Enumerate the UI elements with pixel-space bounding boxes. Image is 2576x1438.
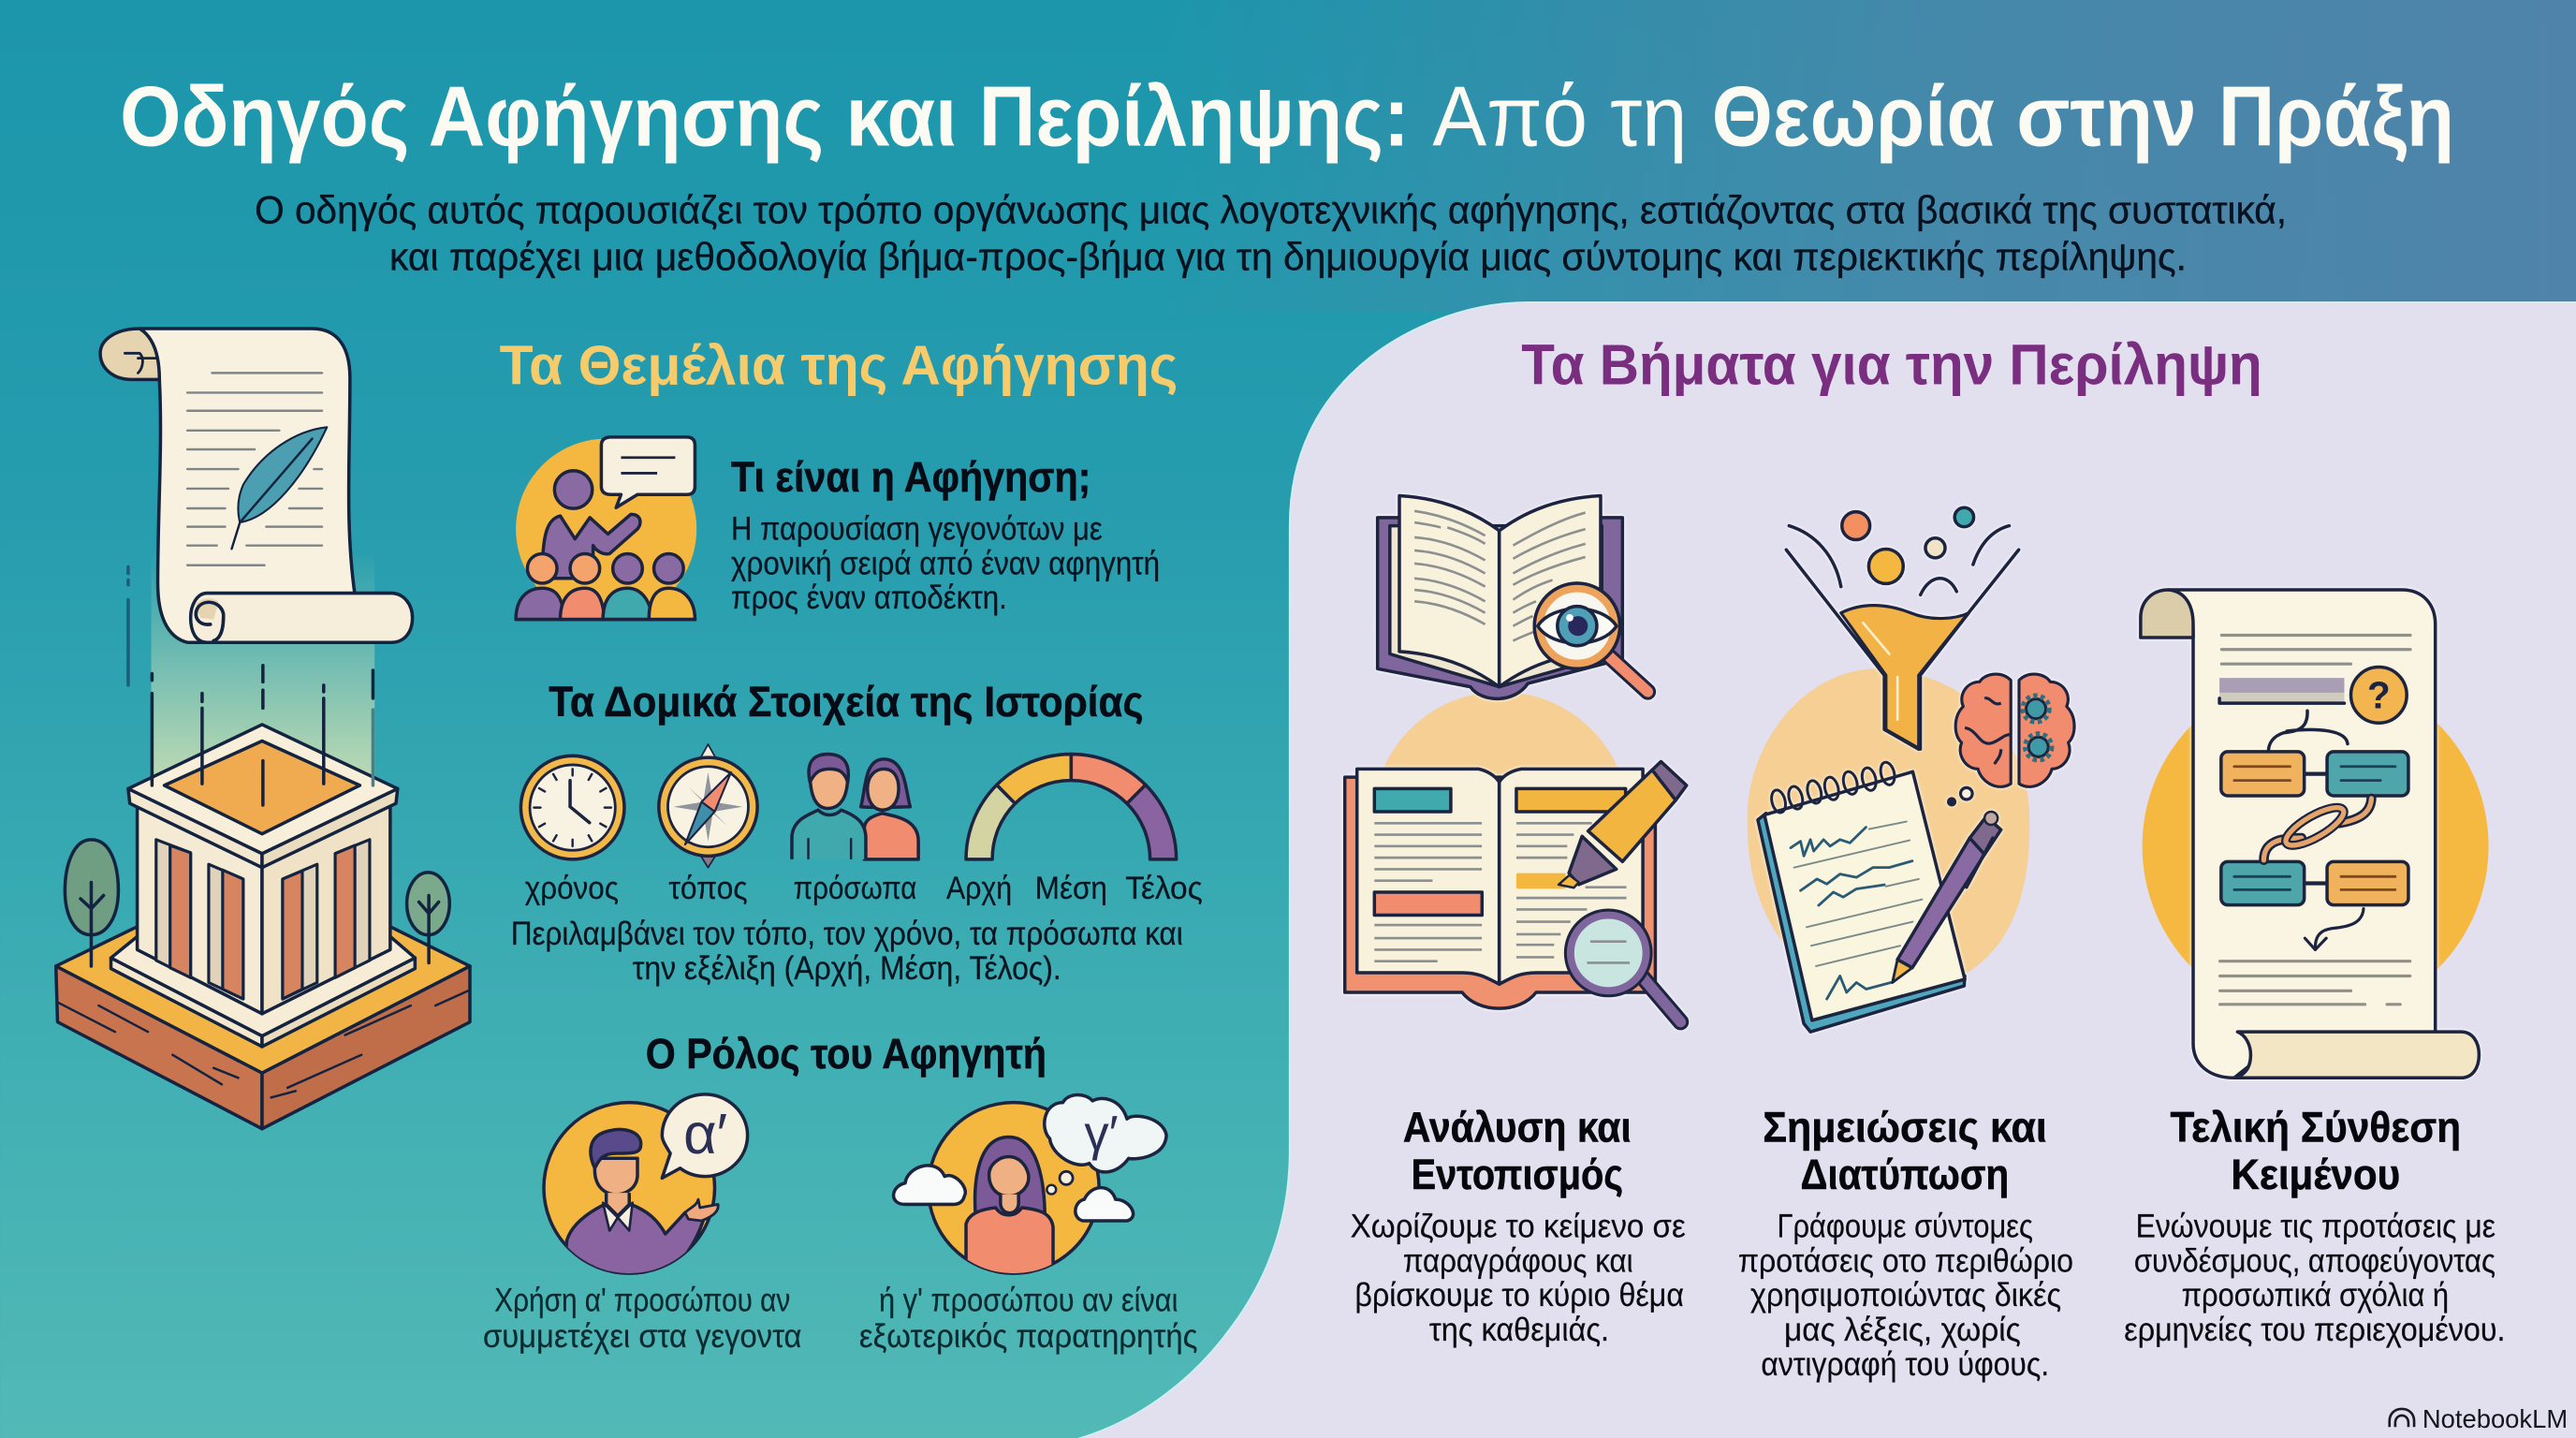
labels: τόπος [668,871,748,906]
labels [525,871,1203,906]
step text: Γράφουμε σύντομες [1777,1209,2033,1245]
icon: pale blob [1748,668,2029,979]
step text: προτάσεις οτο περιθώριο [1738,1242,2073,1279]
icon: first person narrator: α′ [683,1102,727,1167]
block: story elements [511,678,1203,987]
step title: Εντοπισμός [1412,1151,1623,1198]
icon: open book with eye [1378,495,1647,698]
step text: συνδέσμους, αποφεύγοντας [2134,1242,2496,1279]
step 3: final text [2124,590,2505,1348]
logo: NotebookLM: NotebookLM [2422,1404,2568,1433]
caption: third person: εξωτερικός παρατηρητής [859,1318,1197,1355]
icon: scroll with linked ideas: ? [2367,673,2391,716]
icon: left tree [65,840,118,966]
dashed guide lines [128,566,373,805]
heading: steps: Τα Βήματα για την Περίληψη [1521,333,2262,398]
roof slab [128,788,262,868]
icon: two people [792,755,918,859]
step title: Διατύπωση [1801,1151,2009,1198]
icon: third person narrator: γ′ [1084,1107,1119,1162]
caption: first person: συμμετέχει στα γεγοντα [483,1318,802,1355]
description: προς έναν αποδέκτη. [731,580,1007,616]
illustration: scroll over temple [56,329,470,1129]
icon: scroll with linked ideas [2141,590,2479,1078]
step title: Κειμένου [2231,1151,2400,1198]
description [731,511,1160,616]
step title [1403,1104,1632,1198]
labels: Μέση [1035,871,1107,906]
step text: αντιγραφή του ύφους. [1761,1346,2049,1383]
icon: funnel with ideas [1786,507,2019,749]
title: Θεωρία στην Πράξη [1712,68,2454,164]
step text: παραγράφους και [1403,1242,1633,1279]
step text: χρησιμοποιώντας δικές [1750,1277,2061,1313]
subheading: Τι είναι η Αφήγηση; [731,453,1090,501]
description: την εξέλιξη (Αρχή, Μέση, Τέλος). [633,950,1061,987]
step title: Σημειώσεις και [1763,1104,2047,1152]
step text: προσωπικά σχόλια ή [2182,1277,2449,1313]
icon: notepad and pen [1758,761,2001,1032]
labels: χρόνος [525,871,619,906]
title: Οδηγός Αφήγησης και Περίληψης: [120,68,1410,164]
step text [1351,1209,1686,1348]
description [511,916,1183,987]
subheading: Ο Ρόλος του Αφηγητή [646,1030,1046,1078]
step text: βρίσκουμε το κύριο θέμα [1354,1277,1684,1313]
icon: scroll with quill [100,329,413,642]
step text: Ενώνουμε τις προτάσεις με [2136,1209,2496,1245]
step text [1738,1209,2073,1383]
heading: foundations: Τα Θεμέλια της Αφήγησης [500,334,1178,397]
icon: open book with highlighter [1345,761,1687,1022]
icon: right tree [407,873,449,962]
description: Η παρουσίαση γεγονότων με [731,511,1103,548]
panel: steps background [1076,302,2576,1438]
labels: Τέλος [1125,871,1203,906]
icon: pale circle [1372,692,1629,948]
subtitle: και παρέχει μια μεθοδολογία βήμα-προς-βήμα για τη δημιουργία μιας σύντομης και περιεκτικής περίληψης. [389,236,2187,279]
step 1: analysis [1345,495,1687,1348]
step title: Τελική Σύνθεση [2170,1104,2461,1152]
block: narrator role [483,1030,1197,1355]
description: χρονική σειρά από έναν αφηγητή [731,545,1160,581]
labels: πρόσωπα [794,871,916,906]
step 2: notes [1738,507,2074,1383]
step text: Χωρίζουμε το κείμενο σε [1351,1209,1686,1245]
labels: Αρχή [946,871,1012,906]
temple foundation block [56,725,470,1129]
icon: presenter and audience [516,437,696,620]
subtitle: Ο οδηγός αυτός παρουσιάζει τον τρόπο οργάνωσης μιας λογοτεχνικής αφήγησης, εστιάζοντας στα βασικά της συστατικά, [255,189,2287,232]
arc: beginning middle end [966,755,1177,859]
step title [1763,1104,2047,1198]
light beam [152,550,374,782]
walls [138,805,262,1014]
step text: ερμηνείες του περιεχομένου. [2124,1312,2505,1348]
block: what is narration [516,437,1160,620]
subtitle [255,189,2287,279]
subheading: Τα Δομικά Στοιχεία της Ιστορίας [549,678,1144,726]
title: Από τη [1432,68,1687,164]
caption: third person: ή γ' προσώπου αν είναι [879,1283,1178,1319]
icon: first person narrator [544,1094,748,1284]
caption: first person: Χρήση α' προσώπου αν [494,1283,790,1319]
plinth [111,958,262,1047]
caption: first person [483,1283,802,1355]
step text [2124,1209,2505,1348]
title [120,68,2454,164]
step title: Ανάλυση και [1403,1104,1632,1152]
icon: compass [659,744,757,868]
description: Περιλαμβάνει τον τόπο, τον χρόνο, τα πρόσωπα και [511,916,1183,952]
step text: της καθεμιάς. [1429,1312,1609,1348]
icon: brain with gears [1949,674,2074,805]
step text: μας λέξεις, χωρίς [1784,1312,2021,1348]
icon: third person narrator [894,1094,1166,1275]
step title [2170,1104,2461,1198]
caption: third person [859,1283,1197,1355]
icon: clock [520,756,624,859]
icon: yellow circle [2143,673,2489,1020]
